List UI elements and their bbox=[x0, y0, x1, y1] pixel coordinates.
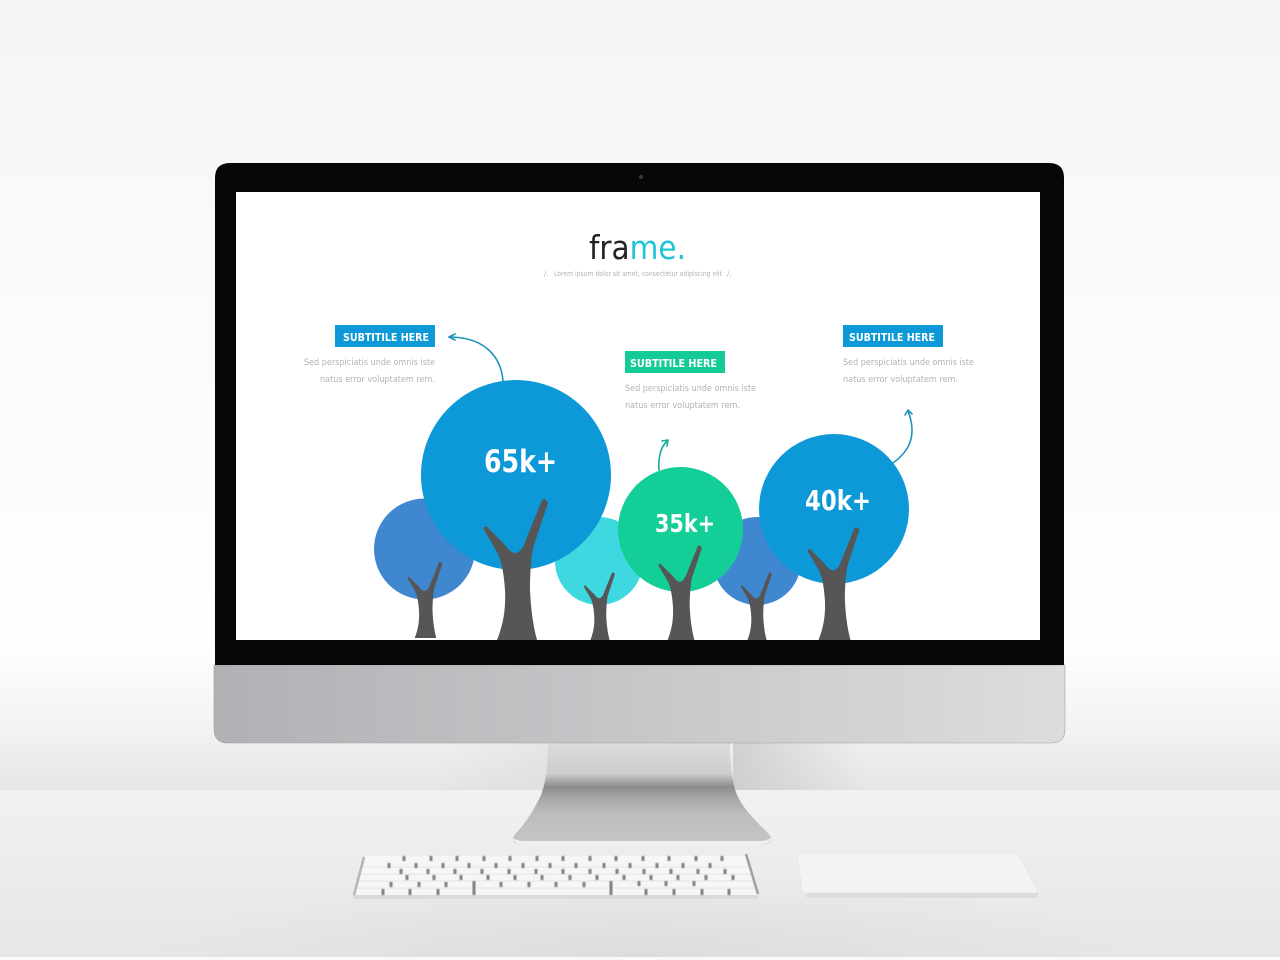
panel: right subtitle bbox=[843, 325, 974, 385]
subtitle badge: SUBTITILE HERE bbox=[343, 331, 429, 344]
tree: 35k bbox=[618, 467, 743, 640]
tree: 40k bbox=[759, 434, 909, 640]
arrow: 65k to left subtitle bbox=[449, 334, 503, 381]
subtitle badge: SUBTITILE HERE bbox=[630, 357, 717, 370]
monitor bezel bbox=[215, 163, 1064, 665]
description: natus error voluptatem rem. bbox=[320, 375, 435, 385]
screen bbox=[236, 192, 1040, 640]
tagline: /. bbox=[727, 270, 732, 278]
description: natus error voluptatem rem. bbox=[625, 401, 740, 411]
arrow: 40k to right subtitle bbox=[893, 410, 912, 463]
panel: middle subtitle bbox=[625, 351, 756, 411]
value: 65k+ bbox=[484, 444, 557, 480]
tree: right small blue bbox=[713, 517, 801, 640]
title: frame. bbox=[589, 228, 686, 267]
camera bbox=[639, 175, 643, 179]
description: natus error voluptatem rem. bbox=[843, 375, 958, 385]
tree: small cyan bbox=[555, 517, 643, 640]
trackpad bbox=[797, 853, 1038, 898]
description: Sed perspiciatis unde omnis iste bbox=[304, 358, 435, 368]
monitor chin bbox=[214, 665, 1065, 743]
description: Sed perspiciatis unde omnis iste bbox=[625, 384, 756, 394]
value: 40k+ bbox=[805, 484, 871, 517]
value: 35k+ bbox=[655, 509, 715, 538]
keyboard bbox=[353, 854, 758, 899]
tagline: Lorem ipsum dolor sit amet, consectetur adipiscing elit bbox=[554, 270, 722, 278]
description: Sed perspiciatis unde omnis iste bbox=[843, 358, 974, 368]
tagline: /. bbox=[544, 270, 549, 278]
subtitle badge: SUBTITILE HERE bbox=[849, 331, 935, 344]
arrow: 35k to middle subtitle bbox=[659, 440, 668, 470]
tree: left small blue bbox=[374, 498, 475, 638]
tree: 65k bbox=[421, 380, 611, 640]
panel: left subtitle bbox=[304, 325, 435, 385]
monitor stand bbox=[513, 743, 771, 845]
